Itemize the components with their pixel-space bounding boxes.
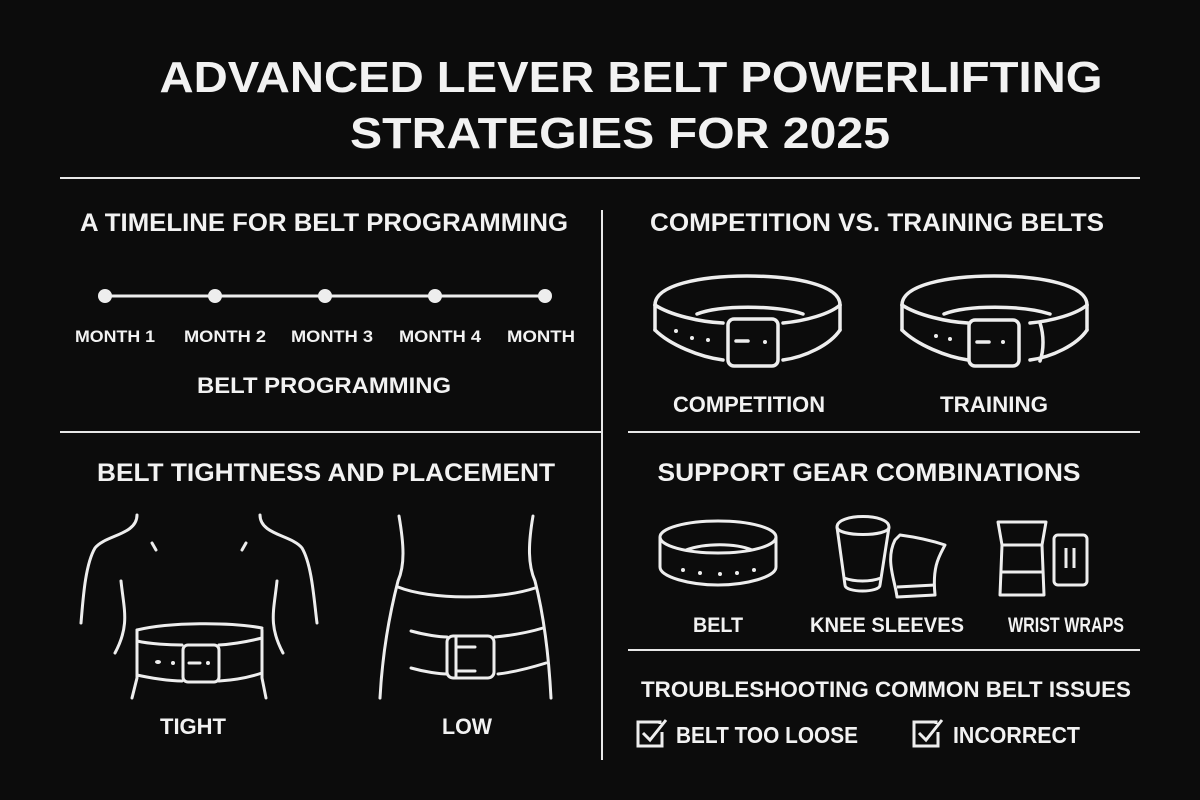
icon: knee sleeves <box>837 516 945 597</box>
label: tight: TIGHT <box>160 714 227 739</box>
checklist item: belt too loose: BELT TOO LOOSE <box>676 722 858 748</box>
subheading: belt programming: BELT PROGRAMMING <box>197 373 451 398</box>
icon: wrist wraps <box>998 522 1087 595</box>
heading: competition vs training: COMPETITION VS. TRAINING BELTS <box>650 209 1104 237</box>
timeline chart: MONTH 2 <box>184 327 266 346</box>
label: competition: COMPETITION <box>673 392 825 417</box>
heading: support gear: SUPPORT GEAR COMBINATIONS <box>658 459 1080 487</box>
label: training: TRAINING <box>940 392 1048 417</box>
heading: troubleshooting: TROUBLESHOOTING COMMON BELT ISSUES <box>641 677 1131 702</box>
icon: belt <box>660 521 776 585</box>
checklist item: incorrect <box>914 720 1080 748</box>
label: knee sleeves: KNEE SLEEVES <box>810 614 964 637</box>
timeline chart <box>75 289 575 346</box>
checklist item: incorrect: INCORRECT <box>953 722 1080 748</box>
panel: troubleshooting <box>638 677 1131 748</box>
title: ADVANCED LEVER BELT POWERLIFTING <box>160 53 1102 102</box>
illustration: tight belt torso <box>81 515 317 698</box>
panel: competition vs training <box>650 209 1104 417</box>
title: STRATEGIES FOR 2025 <box>350 109 890 158</box>
heading: timeline: A TIMELINE FOR BELT PROGRAMMING <box>80 209 568 237</box>
title <box>160 53 1102 158</box>
icon: training belt <box>902 276 1087 366</box>
illustration: low belt <box>380 516 551 698</box>
panel: timeline <box>75 209 575 398</box>
timeline chart: MONTH 1 <box>75 327 155 346</box>
timeline chart: MONTH 3 <box>291 327 373 346</box>
timeline chart: MONTH 4 <box>399 327 482 346</box>
heading: tightness: BELT TIGHTNESS AND PLACEMENT <box>97 459 555 487</box>
panel: tightness and placement <box>81 459 555 739</box>
panel: support gear <box>658 459 1124 637</box>
timeline chart: MONTH <box>507 327 575 346</box>
label: wrist wraps: WRIST WRAPS <box>1008 614 1124 637</box>
label: belt: BELT <box>693 614 743 637</box>
label: low: LOW <box>442 714 492 739</box>
icon: competition belt <box>655 276 840 366</box>
